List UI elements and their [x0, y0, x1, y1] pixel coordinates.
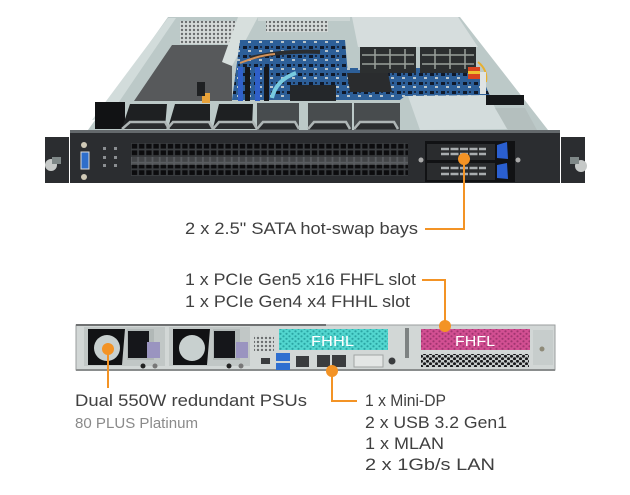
screws — [81, 142, 87, 148]
coloured power wires — [468, 62, 486, 94]
callout: PCIe slots — [185, 270, 416, 311]
psu label — [75, 391, 307, 432]
callout line: pcie — [422, 280, 451, 332]
front panel — [45, 130, 587, 183]
callout: PCIe slots: 1 x PCIe Gen5 x16 FHFL slot — [185, 270, 416, 289]
cpu heatsink — [290, 85, 336, 101]
yellow cables — [202, 93, 210, 103]
psu label: Dual 550W redundant PSUs — [75, 391, 307, 410]
lan ports — [296, 355, 346, 367]
motherboard — [232, 40, 350, 100]
io ports label: 1 x Mini-DP — [365, 391, 446, 410]
io ports label: 2 x 1Gb/s LAN — [365, 455, 495, 474]
server front view — [45, 17, 587, 183]
usb ports — [276, 353, 290, 370]
fhhl bracket — [279, 329, 388, 350]
left ear — [45, 137, 69, 183]
io ports label: 1 x MLAN — [365, 434, 444, 453]
io ports label: 2 x USB 3.2 Gen1 — [365, 413, 507, 432]
callout: drive bays — [185, 153, 470, 238]
psu 2 — [169, 327, 250, 368]
psu 1 — [84, 327, 165, 368]
blue liquid cables — [272, 73, 296, 98]
callout: drive bays: 2 x 2.5" SATA hot-swap bays — [185, 219, 418, 238]
io ports label — [365, 391, 507, 474]
riser bracket — [222, 17, 258, 66]
vga cover — [354, 355, 383, 367]
fhfl bracket — [421, 329, 530, 350]
memory slots — [238, 67, 269, 101]
right ear — [561, 137, 587, 183]
drive bays — [425, 141, 515, 182]
callout line: psu — [102, 343, 114, 388]
fans — [95, 102, 400, 130]
empty left bay floor — [134, 45, 232, 101]
psu label: 80 PLUS Platinum — [75, 416, 198, 432]
io vents — [254, 335, 274, 351]
status leds — [103, 147, 117, 167]
mini-dp — [261, 358, 270, 364]
callout line: io ports — [326, 365, 357, 401]
usb port — [81, 152, 89, 169]
drive cage cover — [408, 95, 507, 130]
fhhl bracket: FHHL — [311, 333, 354, 350]
callout: PCIe slots: 1 x PCIe Gen4 x4 FHHL slot — [185, 292, 410, 311]
fhfl bracket: FHFL — [455, 333, 495, 350]
rear mesh vents — [180, 21, 236, 44]
server rear view — [76, 324, 555, 371]
ventilation grille — [131, 143, 408, 176]
lower vent — [421, 354, 529, 367]
blue latches — [497, 142, 508, 159]
chassis body — [88, 17, 548, 130]
power supply covers — [352, 17, 478, 73]
